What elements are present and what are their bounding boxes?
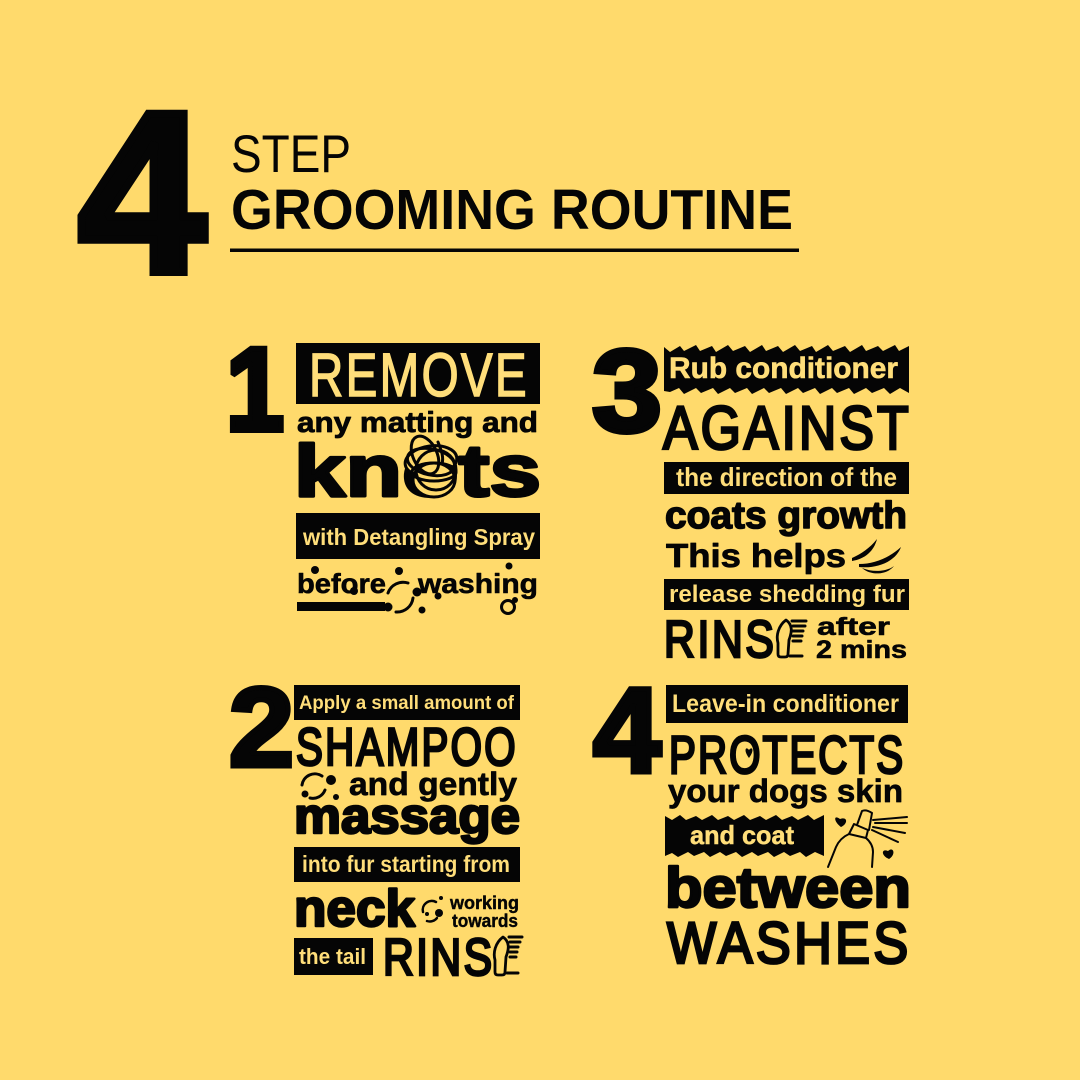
- text: working towards: towards: [452, 911, 518, 931]
- big numeral 4: 4: [78, 64, 206, 321]
- text: before washing: [297, 562, 538, 614]
- text: RINSE with comb icon: RINS: [664, 611, 774, 669]
- icon: spray bottle with hearts: [828, 810, 907, 867]
- banner: and coat: and coat: [690, 820, 794, 850]
- title underline: [230, 248, 799, 252]
- numeral 1: 1: [226, 324, 284, 456]
- text: between: between: [665, 856, 911, 920]
- panel: step 2: [229, 665, 522, 987]
- text: after 2 mins: [816, 613, 907, 664]
- text: neck: neck: [294, 880, 415, 938]
- banner: the tail: the tail: [299, 944, 366, 969]
- title: GROOMING ROUTINE: GROOMING ROUTINE: [231, 178, 793, 242]
- banner: the direction of the: the direction of the: [676, 462, 897, 492]
- banner: into fur starting from: into fur starting from: [302, 851, 510, 877]
- icon: knot scribble: [403, 432, 459, 497]
- text: knots with scribble: knots: [294, 431, 541, 512]
- numeral 2: 2: [229, 665, 294, 790]
- text: This helps: This helps: [666, 537, 846, 574]
- banner: REMOVE: REMOVE: [309, 340, 527, 409]
- text: massage: massage: [294, 788, 520, 844]
- icon: comb: [494, 937, 522, 975]
- banner: Leave-in conditioner: Leave-in conditioner: [672, 690, 899, 718]
- title block: [78, 64, 799, 321]
- banner: with Detangling Spray: with Detangling Spray: [302, 524, 535, 550]
- numeral 4: 4: [593, 662, 661, 798]
- text: working towards: working: [449, 893, 519, 913]
- numeral 3: 3: [592, 325, 662, 456]
- text: after 2 mins: 2 mins: [816, 636, 907, 664]
- icon: fur tufts: [852, 539, 901, 573]
- banner: Apply a small amount of: [294, 685, 520, 720]
- text: AGAINST: AGAINST: [663, 394, 909, 462]
- banner: with Detangling Spray: [296, 513, 540, 559]
- text: before washing: washing: [417, 568, 538, 599]
- icon: comb: [777, 620, 806, 657]
- text: SHAMPOO: SHAMPOO: [296, 717, 516, 776]
- icon: bubbles: [302, 774, 339, 800]
- text: PROTECTS: PROTECTS: [669, 725, 903, 784]
- panel: step 3: [592, 325, 909, 669]
- banner: Apply a small amount of: Apply a small amount of: [299, 692, 514, 714]
- text: WASHES: WASHES: [667, 910, 908, 976]
- text: RINSE with comb icon: RINS: [383, 929, 492, 987]
- icon: small bubbles: [423, 896, 443, 921]
- text: coats growth: coats growth: [665, 495, 907, 537]
- banner: into fur starting from: [294, 847, 520, 882]
- title: STEP: STEP: [231, 125, 351, 184]
- banner: the tail: [294, 938, 373, 975]
- text: before washing: before: [297, 568, 386, 599]
- banner: release shedding fur: release shedding fur: [669, 581, 905, 608]
- text: your dogs skin: your dogs skin: [668, 773, 903, 809]
- text: after 2 mins: after: [817, 613, 890, 641]
- panel: step 4: [593, 662, 911, 976]
- text: and gently: and gently: [349, 766, 517, 802]
- banner: and coat: [665, 815, 824, 857]
- banner: Rub conditioner: [664, 345, 909, 394]
- icon: heart in O: [746, 748, 752, 758]
- text: working towards: [449, 893, 519, 931]
- text: any matting and: any matting and: [297, 407, 538, 439]
- banner: Rub conditioner: Rub conditioner: [669, 352, 898, 385]
- panel: step 1: [226, 324, 911, 987]
- icon: bubbles: [311, 562, 518, 614]
